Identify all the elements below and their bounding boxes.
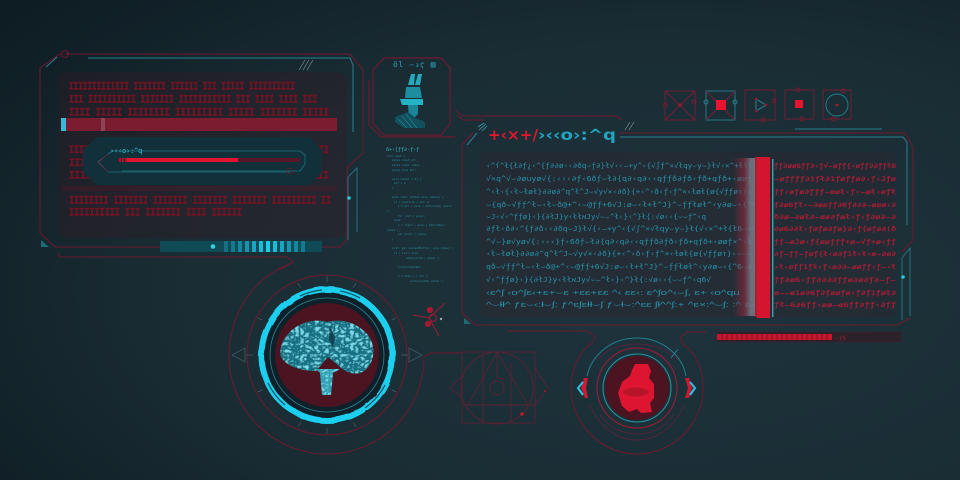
- cipher text in red: ∂ø6∂∂ł‹ƒøƒø∂ƒø}∂‹ƒ{øƒø∂(ð: [774, 225, 896, 233]
- status bar: ⌣ƒ%: [835, 335, 847, 342]
- code block: func text {: [387, 154, 405, 158]
- cipher text in red: ø⌣⌣ø1ø∂6ƒ∂ƒøøƒø‹ƒ∂ƒ1ƒøł∂: [774, 289, 896, 297]
- cipher text in cyan: ⌣{qð⌣√ƒƒ^ł⌣‹ł⌣ð@+^‹⌣@ƒƒ+6√J:ø⌣‹ł+ł^J}^⌣ƒƒłøł^‹y∂ø⌣‹{^6: [486, 201, 757, 209]
- scan sweep: [733, 157, 774, 318]
- geometric diagram: [450, 352, 548, 424]
- code block: };: [387, 209, 390, 213]
- status bar: [717, 332, 901, 342]
- cipher text in cyan: ^√⌣}ø√yø√{:‹‹‹}ƒ‹6ðƒ⌣ł∂{q∂‹q∂‹‹qƒƒð∂ƒð‹ƒð+qƒð+‹øøƒ×^‹ł‹: [486, 238, 757, 246]
- cipher text in red: ð∂ø⌣∂øł∂⌣øø∂ƒøł‹ƒ‹ƒ∂ø∂⌣∂: [774, 213, 896, 221]
- cipher text in cyan: [486, 161, 757, 309]
- icon: crossed box: [663, 91, 696, 120]
- code block: bytes size buf;: [392, 168, 416, 172]
- code block: stack );: [387, 228, 400, 232]
- redacted text block: III IIIIIIII IIIII IIIIIII IIII IIIIIIII IIII: [69, 158, 319, 170]
- code block: ð÷‹{ƒƒ∂-ƒ‹ƒ: [386, 147, 419, 153]
- cipher text in red: ƒƒ∂øø6ƒƒ∂‹ƒ√⌣øƒƒ{‹øƒƒ∂∂ƒƒł6: [774, 162, 896, 170]
- cipher text in cyan: ∂ƒł‹ð∂‹^{ƒ∂ð‹‹∂ðq⌣J}ł√{‹⌢+y^‹{√ʃ^×√łqy⌣y⌣}ł{√‹×^+ł{ł6⌣×q: [486, 225, 757, 233]
- cipher text in cyan: ‹^ſ^ł{ł∂ƒ¿‹^{ƒ∂∂ø‹‹∂ðq⌣ƒ∂}ł√‹‹⌢+y^‹{√∫ƒ^×√łqy⌣y⌣}ł√‹×^+łłł{: [486, 161, 757, 170]
- icon: red organ: [618, 364, 654, 413]
- cipher text in red: ƒƒ∂ø6‹ƒƒ∂∂∂∂ƒƒø∂ø∂ƒ∂⌣ƒ⌣: [774, 276, 896, 284]
- connector line: [424, 353, 462, 357]
- code block: [386, 147, 454, 283]
- icon row: [663, 88, 851, 122]
- code block: init: get contextBuffer( size index) {: [392, 246, 454, 250]
- code block: bytes input index: [392, 163, 420, 167]
- cipher text in cyan: ‹ɛ^ʃ ‹o^ʃɛ‹+ɛ+⌣ɛ +ɛɛ+ɛɛ ^‹ ɛɛ‹: ɛ^ʃo^‹⌣ʃ, ɛ+ ‹o^qu: [486, 290, 740, 297]
- redacted text block: IIIIIIIIIIIII IIIIIII IIIIII III IIIII IIIIIIIIII: [69, 82, 295, 94]
- cipher text in cyan: ^‹ł‹{‹ł⌣łøł}∂∂ø∂^q^ł^J⌣√y√×‹∂ð}{+‹^‹ð‹ƒ‹ƒ^×‹łøł{ø{√ƒƒøז}‹⌣: [486, 188, 757, 196]
- code block: }: [392, 237, 394, 241]
- cyan ring: [262, 290, 392, 420]
- tick ring: [232, 275, 422, 435]
- panel background: [480, 152, 895, 317]
- cipher text in red: ∂ƒ⌣ƒƒ⌣ƒøƒ{ł‹ø∂ƒ1ł‹ł‹ø⌣∂ø∂: [774, 250, 896, 258]
- cipher text in cyan: √‹^ƒƒø}‹}{∂łJ}y‹łłאJy√⌣⌢^ł‹}‹^}ł{:√ø‹‹{⌣⌣ƒ^‹q6√: [486, 276, 712, 284]
- icon: triangle box: [745, 90, 776, 122]
- heading: text/decoding: ›‹‹o›:^q: [538, 126, 616, 144]
- code block: if ( position = buf ){: [394, 200, 430, 204]
- panel background: [58, 72, 347, 238]
- code block: s = data + ( int );: [398, 274, 429, 278]
- heading: text/decoding: [488, 126, 616, 144]
- icon: red core box: [704, 91, 737, 120]
- code block: s = input + size ( add(index): [398, 223, 445, 227]
- icon: red square box: [785, 88, 814, 121]
- panel: left text panel: [40, 50, 363, 270]
- outer rings: [587, 338, 686, 376]
- heading: text/decoding: +‹×+/: [488, 126, 539, 144]
- code block: initContextBuf: [398, 265, 421, 269]
- inner disc: [605, 356, 669, 420]
- microscope header: öl ⌢₃ҁ ▨: [393, 60, 436, 69]
- code block: byte init: offset size index[] {: [392, 195, 444, 199]
- cipher text in red: ƒ∂ø6ƒł‹⌣∂øøƒƒ∂6ƒ∂∂∂⌣øøø‹∂: [774, 201, 896, 209]
- code block: buf = s: [394, 181, 406, 185]
- code block: for (buf = size);: [398, 214, 426, 218]
- gauge connector lines: [507, 331, 707, 454]
- redacted text block: IIII IIIII IIIIIIII IIIIIIIII IIIII IIIIIII IIIII: [69, 108, 329, 120]
- icon: red marker: [413, 303, 445, 336]
- cipher text in red: ƒƒ⌣øJø‹ƒ{øøƒƒƒ+ø⌣√ƒ+ø‹ƒƒ: [774, 238, 896, 246]
- redacted text block: IIIIIIIIII III IIIIIII IIII IIIIII: [69, 208, 242, 220]
- capsule label: ›‹‹o›:^q: [110, 147, 142, 155]
- code block: s = ptr + size ( add(index) stack: [398, 204, 452, 208]
- cipher text in cyan: ^⌣łł^ ƒɛ⌣‹:ł⌣ʃ: ƒ^ɛʃɛłł⌣ʃ ƒ⌣ł⌣:^ɛɛ ʃł^^ʃ:+ ^ɛ×:^⌣ʃ: :^ ɛ+: [486, 302, 757, 309]
- code block: ptr point = value;: [398, 232, 427, 236]
- segmented meter: [160, 241, 322, 252]
- code block: if ( buf = size: [394, 251, 419, 255]
- panel frame: [40, 50, 363, 270]
- chevrons: [578, 378, 695, 398]
- cipher text in red: [774, 162, 896, 309]
- icon: circle box: [823, 89, 851, 121]
- cipher text in cyan: √×q^√⌣∂øuyø√{:‹‹‹∂ƒ‹6ðƒ⌣ł∂{q∂‹q∂‹‹qƒƒð∂ƒð‹ƒð+qƒð+‹øøƒ×: [486, 175, 757, 183]
- redacted text block: IIIIIII IIIIIII IIIII IIIIIII III IIIIIII IIIII IIII: [69, 145, 329, 157]
- cipher text in cyan: ⌣J‹√‹^ƒƒø}‹}{∂łJ}y‹łłאJy√⌣⌢^ł‹}‹^}ł{:√ø‹‹{⌣⌣ƒ^‹q: [486, 213, 706, 221]
- cipher text in red: ‹ł‹øƒƒ1ƒł‹ƒ‹ø∂∂⌣øøƒƒ‹ƒ⌣‹ł: [774, 263, 896, 271]
- code block: void read(i = 0) {: [392, 177, 422, 181]
- redacted text block: IIII IIIIII IIIIIIII IIIII IIIIIII IIIIII IIIII: [69, 170, 329, 182]
- code block: context[add] stack );: [410, 279, 444, 283]
- code block: add(pointer) stack );: [406, 256, 440, 260]
- red organ gauge: [507, 331, 707, 454]
- panel: decoding text panel: [455, 110, 913, 342]
- icon: microscope: [395, 74, 425, 128]
- code block: bytes input ptr,: [392, 158, 418, 162]
- code block: }: [392, 186, 394, 190]
- outer arc: [229, 263, 424, 454]
- code block: else: [394, 218, 401, 222]
- redacted text block: III IIIIIIIIII IIIIIII IIIIIIIIIII III IIII IIII III: [69, 94, 317, 106]
- cipher text in cyan: qð⌣√ƒƒ^ł⌣‹ł⌣ð@+^‹⌣@ƒƒ+6√J:ø⌣‹ł+ł^J}^⌣ƒƒłøł^‹y∂ø⌣‹{^6⌣∂ƒ: [486, 263, 757, 271]
- highlight bar: [61, 118, 337, 131]
- progress capsule: [83, 137, 322, 185]
- cipher text in red: ⌣øƒƒƒƒ∂1ƒł∂1ƒøƒƒø∂‹ƒ‹Jƒø: [774, 175, 896, 183]
- progress bar: [118, 158, 300, 162]
- cipher text in cyan: ‹ł⌣łøł}∂∂ø∂^q^ł^J⌣√y√×‹∂ð}{+‹^‹ð‹ƒ‹ƒ^×‹łøł{ø{√ƒƒøז}‹⌣⌣⌣{: [486, 250, 757, 258]
- cipher text in red: ƒƒ‹øƒø∂ƒƒƒ⌣øøł‹ƒ‹⌣øł‹øƒł: [774, 188, 896, 196]
- brain gauge: [229, 263, 462, 454]
- microscope frame: [369, 58, 455, 137]
- icon: brain: [280, 321, 373, 395]
- inner disc: [264, 292, 390, 418]
- decoding panel frame: [455, 110, 913, 325]
- panel: microscope: [369, 58, 455, 283]
- brain midline: [329, 326, 335, 348]
- redacted text block: IIIIIIII IIIIIII IIIIIII IIIIIII IIIIIII IIIIIIIII II: [69, 196, 331, 208]
- redacted text block: [69, 82, 331, 220]
- cipher text in red: ƒł⌣6∂6ƒƒ‹øø⌣ø6ƒƒ∂ƒƒ‹∂ƒƒ: [774, 301, 896, 309]
